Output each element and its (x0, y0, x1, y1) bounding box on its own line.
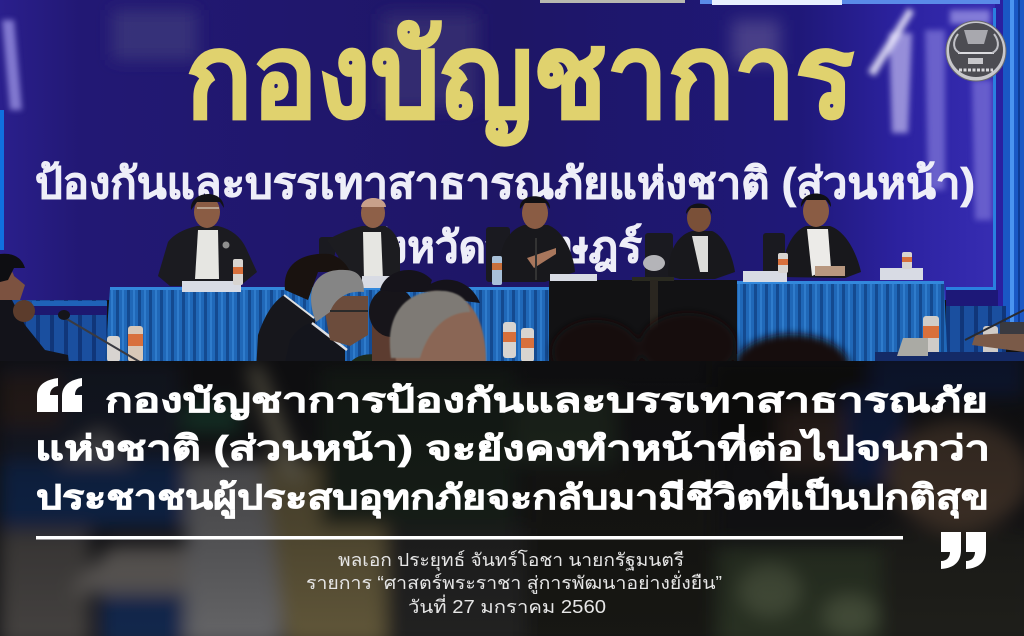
audience: dark suit man (256, 254, 350, 372)
audience: grey haired man (283, 270, 368, 372)
photo: right delegate hand (875, 310, 1024, 368)
province word left: จังหวัด (362, 224, 486, 272)
photo: left seated delegate (0, 254, 150, 372)
divider rule (36, 536, 903, 540)
audience: third man (345, 270, 480, 372)
banner title: กองบัญชาการ (186, 11, 854, 146)
official 1 (158, 194, 257, 286)
audience: blurred heads (552, 313, 850, 402)
seal emblem (946, 21, 1006, 81)
opening quote mark (37, 378, 82, 412)
photo: name plates on table (182, 268, 923, 292)
quote text (35, 382, 990, 519)
photo: curtain and skirt beside tables (0, 290, 1006, 366)
attribution (306, 549, 722, 617)
date: วันที่ 27 มกราคม 2560 (408, 594, 606, 617)
photo: audience in foreground (256, 254, 850, 402)
quote line 1: กองบัญชาการป้องกันและบรรเทาสาธารณภัย (105, 382, 988, 421)
dark overlay band (0, 361, 1024, 636)
speaker name: พลเอก ประยุทธ์ จันทร์โอชา นายกรัฐมนตรี (338, 549, 684, 571)
photo: blurred lower foreground (0, 351, 1024, 636)
programme name: รายการ “ศาสตร์พระราชา สู่การพัฒนาอย่างยั่งยืน” (306, 570, 722, 594)
official 5 (781, 194, 861, 278)
photo: blue clothed tables (104, 281, 948, 372)
official 2 (327, 198, 400, 280)
quote line 2: แห่งชาติ (ส่วนหน้า) จะยังคงทำหน้าที่ต่อไปจนกว่า (35, 424, 990, 468)
official 3 (498, 196, 575, 282)
quote line 3: ประชาชนผู้ประสบอุทกภัยจะกลับมามีชีวิตที่เป็นปกติสุข (36, 473, 989, 519)
photo: stage banner backdrop (0, 0, 1024, 340)
photo: five officials at the head table (158, 194, 861, 286)
closing quote mark (941, 532, 986, 569)
photo: black podium and camera (549, 255, 737, 370)
province word right: สุราษฎร์ (484, 223, 642, 275)
banner province line (362, 223, 642, 275)
photo: chairs behind head table (319, 227, 785, 283)
photo: water bottles (107, 252, 998, 362)
official 4 (668, 204, 735, 279)
audience: front balding man (390, 291, 486, 372)
banner subtitle: ป้องกันและบรรเทาสาธารณภัยแห่งชาติ (ส่วนหน้า) (35, 160, 975, 208)
